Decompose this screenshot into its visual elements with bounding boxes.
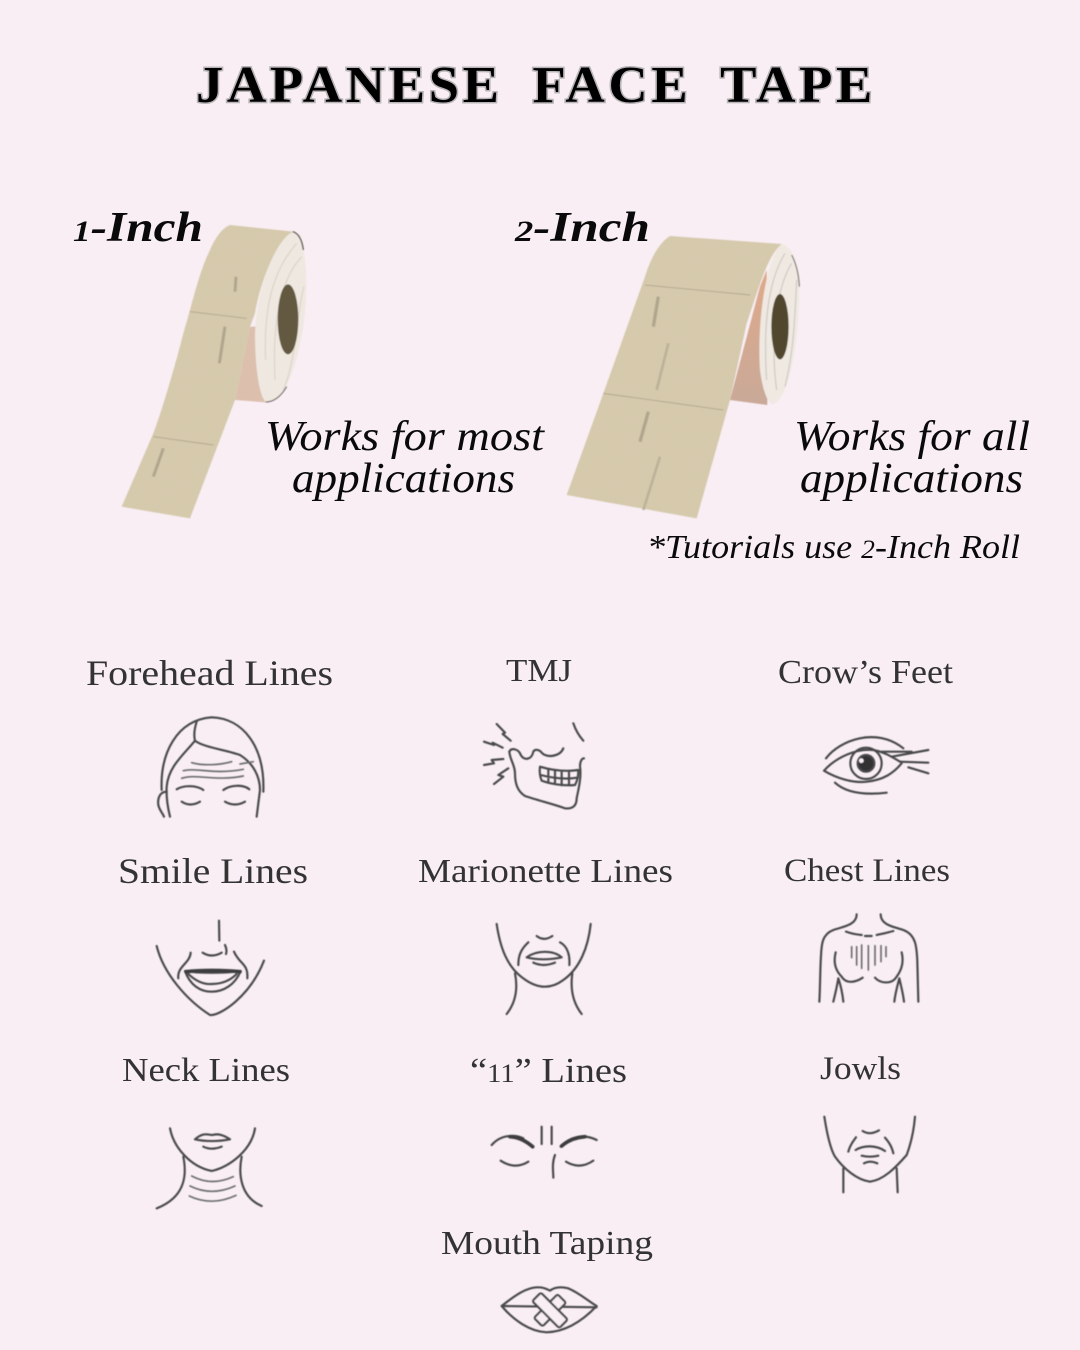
- icon: taped lips: [502, 1287, 597, 1332]
- label: forehead lines: Forehead Lines: [86, 653, 333, 693]
- text: works for most applications: applications: [292, 456, 515, 502]
- icon: jowls: [824, 1117, 915, 1192]
- size label: 2-inch: 2-Inch: [514, 205, 650, 251]
- icon: 11 lines brows: [492, 1127, 597, 1178]
- title: JAPANESE FACE TAPE: [196, 57, 876, 114]
- icon: neck: [157, 1128, 262, 1208]
- label: marionette lines: Marionette Lines: [418, 853, 673, 890]
- icon: 1-inch tape roll: [122, 225, 306, 518]
- text: works for all applications: [794, 414, 1030, 502]
- label: TMJ: TMJ: [506, 652, 572, 688]
- text: works for all applications: Works for all: [794, 414, 1030, 460]
- icon: eye: [824, 737, 928, 794]
- panel: 1-inch roll: [73, 205, 545, 518]
- label: mouth taping: Mouth Taping: [441, 1225, 653, 1262]
- text: works for all applications: applications: [800, 456, 1023, 502]
- icon: smile: [157, 921, 264, 1015]
- icon: forehead: [158, 717, 263, 817]
- footnote: tutorials: *Tutorials use 2-Inch Roll: [647, 529, 1020, 566]
- icon: jaw pain: [484, 723, 584, 808]
- icon: chest: [819, 914, 918, 1002]
- label: chest lines: Chest Lines: [784, 853, 950, 889]
- text: works for most applications: Works for most: [265, 414, 545, 460]
- label: smile lines: Smile Lines: [118, 851, 308, 891]
- label: crow's feet: Crow’s Feet: [778, 654, 954, 691]
- label: jowls: Jowls: [820, 1051, 901, 1087]
- panel: 2-inch roll: [514, 205, 1030, 566]
- label: neck lines: Neck Lines: [122, 1052, 290, 1089]
- size label: 1-inch: 1-Inch: [73, 205, 203, 251]
- label: 11 lines: “11” Lines: [470, 1051, 627, 1090]
- panel: treatment areas: [86, 652, 954, 1332]
- icon: 2-inch tape roll: [567, 236, 799, 518]
- icon: marionette: [497, 924, 591, 1014]
- text: works for most applications: [265, 414, 545, 502]
